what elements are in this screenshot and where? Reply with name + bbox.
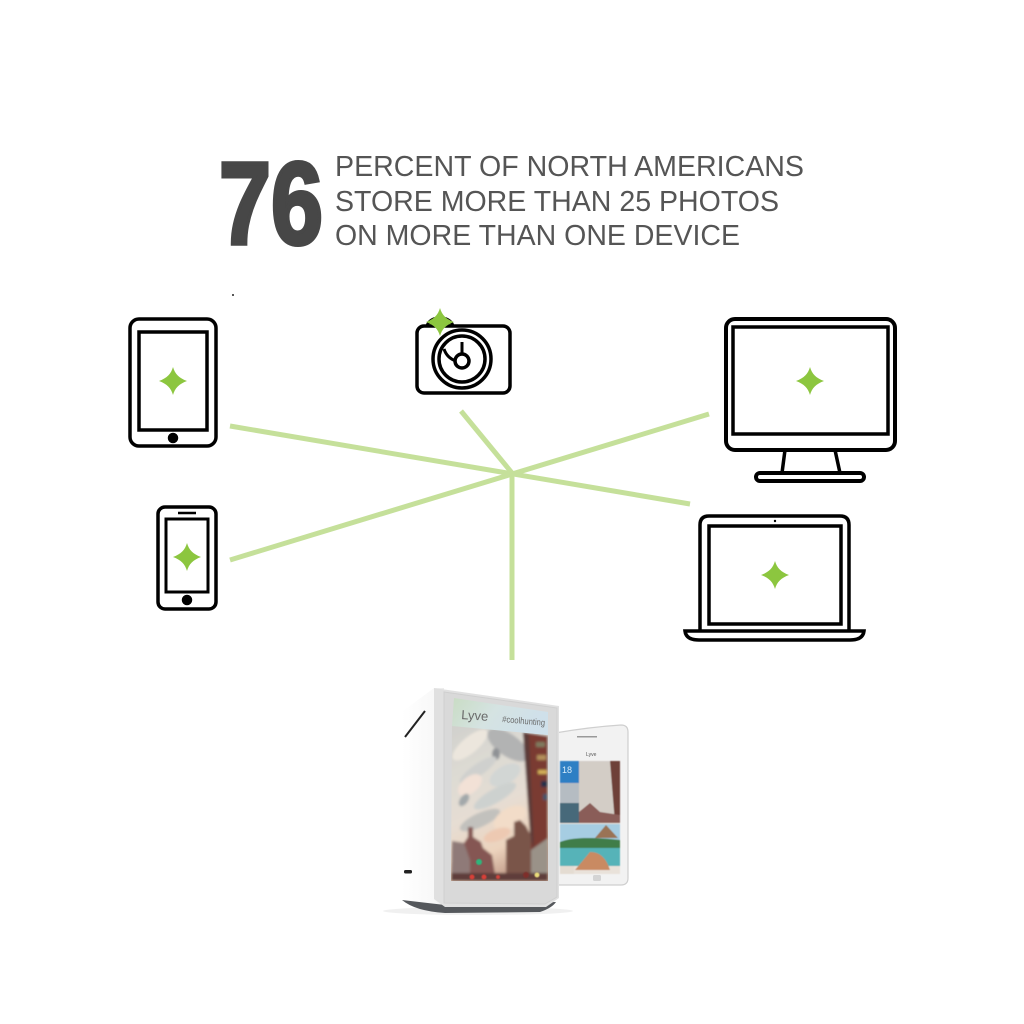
screen header: Lyve	[452, 698, 548, 735]
screen header: Lyve: Lyve	[461, 707, 489, 724]
big number 76: 76	[219, 138, 323, 269]
headline: 76 percent statistic	[219, 138, 804, 269]
phone behind device	[555, 725, 628, 885]
device front panel	[434, 688, 559, 907]
phone behind device: 18	[562, 765, 572, 775]
stray mark	[232, 294, 234, 296]
phone behind device: Lyve	[586, 752, 597, 758]
icon: desktop monitor	[726, 319, 895, 481]
device base	[402, 900, 556, 913]
icon: smartphone	[158, 507, 216, 609]
photo on device screen	[451, 726, 548, 881]
soft shadow	[383, 907, 573, 915]
connector lines between devices	[230, 411, 709, 660]
statistic description: STORE MORE THAN 25 PHOTOS	[335, 186, 779, 218]
statistic description	[335, 151, 804, 252]
screen header: Lyve: #coolhunting	[502, 714, 546, 728]
icon: camera	[417, 308, 510, 393]
icon: tablet	[130, 319, 216, 446]
statistic description: PERCENT OF NORTH AMERICANS	[335, 151, 804, 183]
statistic description: ON MORE THAN ONE DEVICE	[335, 220, 740, 252]
device side	[402, 688, 444, 908]
icon: laptop	[685, 516, 864, 640]
product image: Lyve device and phone	[383, 688, 628, 915]
